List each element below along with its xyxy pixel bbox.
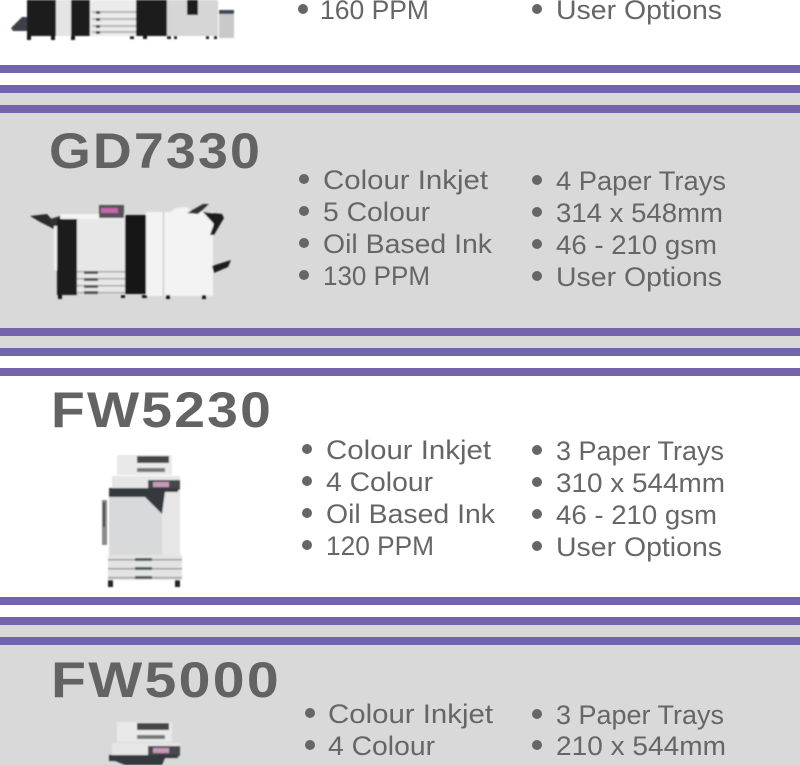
specs: FW5000: 210 x 544mm — [556, 731, 726, 761]
specs: FW5000: 3 Paper Trays — [556, 700, 724, 730]
specs: FW5230: User Options — [556, 532, 722, 562]
specs: GD7330: 5 Colour — [323, 197, 430, 227]
specs: GD7330: 314 x 548mm — [556, 198, 723, 228]
specs: GD7330: 46 - 210 gsm — [556, 230, 717, 260]
specs: GD7330: User Options — [556, 262, 722, 292]
icon: FW5230 printer — [102, 455, 182, 587]
specs: FW5000 — [305, 699, 726, 761]
heading: FW5000: FW5000 — [51, 652, 281, 708]
specs: GD7330: Colour Inkjet — [323, 165, 489, 195]
icon: GD7330 printer — [30, 204, 231, 299]
specs: FW5230: 120 PPM — [326, 531, 434, 561]
specs: GD7330 — [299, 165, 726, 292]
specs: GD7330: 4 Paper Trays — [556, 166, 726, 196]
icon: top printer — [11, 0, 234, 40]
specs: FW5230: 310 x 544mm — [556, 468, 725, 498]
specs: FW5230 — [302, 435, 725, 562]
purple stripes — [0, 65, 800, 645]
specs: FW5000: 4 Colour — [328, 731, 435, 761]
heading: FW5230: FW5230 — [51, 382, 273, 438]
specs: FW5230: Oil Based Ink — [326, 499, 496, 529]
specs: FW5000: Colour Inkjet — [328, 699, 494, 729]
icon: FW5000 printer — [109, 722, 180, 765]
top specs — [298, 0, 722, 25]
panel: GD7330 background — [0, 93, 800, 356]
specs: FW5230: 3 Paper Trays — [556, 436, 724, 466]
specs: FW5230: 4 Colour — [326, 467, 433, 497]
specs: FW5230: Colour Inkjet — [326, 435, 492, 465]
panel: FW5000 background — [0, 625, 800, 765]
specs: GD7330: 130 PPM — [323, 261, 430, 291]
specs: FW5230: 46 - 210 gsm — [556, 500, 717, 530]
specs: GD7330: Oil Based Ink — [323, 229, 493, 259]
heading: GD7330: GD7330 — [49, 123, 262, 179]
